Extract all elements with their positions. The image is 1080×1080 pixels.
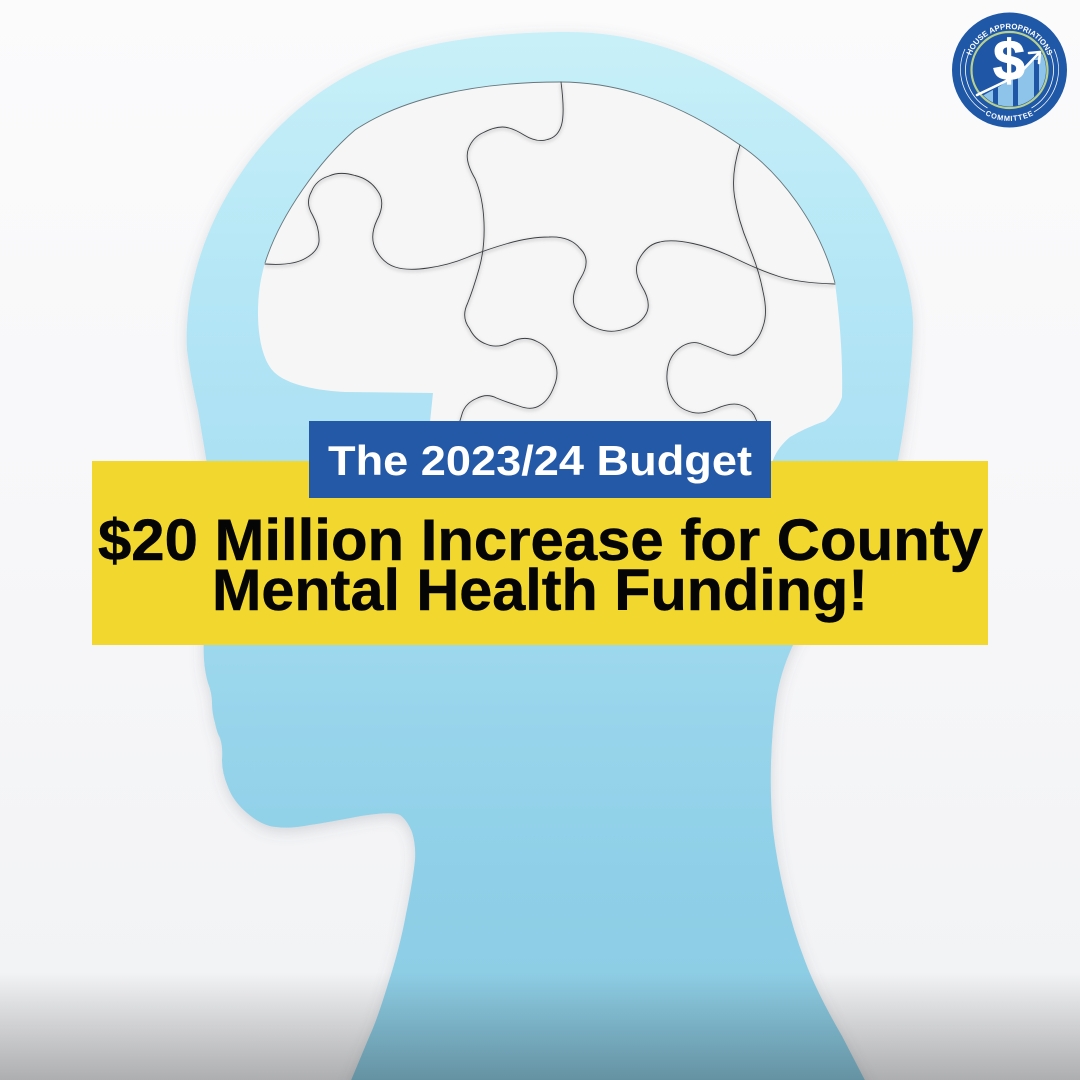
- seal green ring: [972, 32, 1048, 108]
- puzzle cut lines: [265, 82, 835, 424]
- subtitle: The 2023/24 Budget: [328, 437, 752, 484]
- head silhouette: [187, 32, 913, 1080]
- brain top edge: [265, 82, 835, 283]
- seal bottom text: COMMITTEE: [986, 110, 1034, 121]
- floor shadow at bottom: [0, 972, 1080, 1080]
- logo: House Appropriations Committee seal: [952, 12, 1067, 128]
- seal bars: [983, 54, 1046, 106]
- puzzle brain: [258, 82, 842, 480]
- headline: [98, 508, 983, 623]
- seal dollar sign: $: [993, 29, 1025, 93]
- yellow headline banner: [92, 461, 988, 645]
- seal thin rings: [960, 49, 1059, 112]
- headline line 2: Mental Health Funding!: [212, 558, 868, 623]
- puzzle piece soft shadows: [265, 84, 835, 426]
- seal top text: HOUSE APPROPRIATIONS: [966, 24, 1052, 56]
- headline line 1: $20 Million Increase for County: [98, 508, 983, 573]
- blue subtitle box: [309, 421, 771, 498]
- seal arrow: [977, 52, 1040, 95]
- brain shape: [258, 82, 842, 480]
